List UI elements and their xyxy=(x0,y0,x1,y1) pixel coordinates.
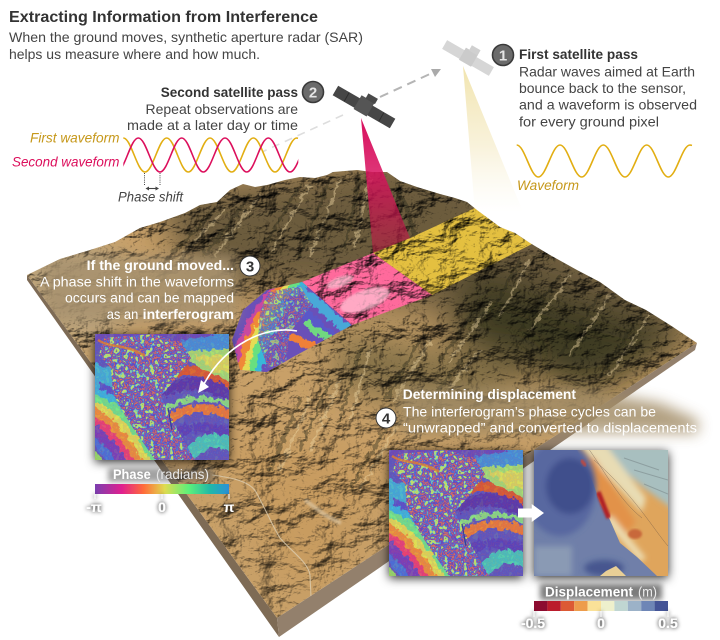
step 3 heading: If the ground moved... xyxy=(87,257,234,273)
phase shift marker xyxy=(144,173,160,190)
left side wall xyxy=(27,275,279,637)
step 1: first satellite pass xyxy=(492,44,697,193)
second satellite beam xyxy=(361,118,410,253)
displacement ticks and labels: -0.5 xyxy=(521,615,545,631)
step 3: interferogram xyxy=(40,256,297,515)
pale patches on pink band xyxy=(326,274,391,314)
title block xyxy=(9,9,363,62)
step 3 body: A phase shift in the waveforms xyxy=(40,274,234,290)
second satellite icon xyxy=(332,78,400,130)
badge 3 xyxy=(240,256,260,276)
step 1 body: for every ground pixel xyxy=(519,114,659,130)
pale wash xyxy=(305,500,341,523)
tan text backing xyxy=(400,389,698,433)
step 2 heading: Second satellite pass xyxy=(161,84,298,100)
badge 3: 3 xyxy=(246,258,254,276)
step 3 body: interferogram xyxy=(143,306,234,322)
road xyxy=(212,475,311,597)
arrow head xyxy=(431,69,441,77)
first satellite icon xyxy=(442,33,498,77)
phase ticks and labels: 0 xyxy=(158,499,166,515)
first waveform xyxy=(123,138,298,172)
legend dark backing xyxy=(108,468,214,482)
badge 4: 4 xyxy=(382,410,391,428)
phase legend xyxy=(86,466,235,515)
single waveform xyxy=(517,145,692,177)
step 4 body: “unwrapped” and converted to displacements xyxy=(403,420,697,436)
step 3 body: occurs and can be mapped xyxy=(65,290,234,306)
displacement ticks and labels: 0.5 xyxy=(658,615,678,631)
western block xyxy=(534,450,657,576)
yellow band xyxy=(373,208,532,295)
step 4 heading: Determining displacement xyxy=(403,386,576,402)
phase legend title xyxy=(113,466,209,482)
title block: helps us measure where and how much. xyxy=(9,46,260,62)
badge 2 xyxy=(302,82,324,102)
dashed arrow xyxy=(380,73,432,97)
phase ticks and labels: π xyxy=(224,499,235,515)
subtitle: When the ground moves, synthetic aperture radar (SAR) xyxy=(9,29,363,45)
white arrow xyxy=(518,504,544,522)
displacement map xyxy=(524,440,674,576)
displacement ticks and labels: 0 xyxy=(597,615,605,631)
mountain ridges xyxy=(165,178,650,490)
step 1 body: bounce back to the sensor, xyxy=(519,80,686,96)
terrain block xyxy=(27,170,697,637)
dashed path between passes xyxy=(262,69,441,152)
step 1 body xyxy=(519,64,697,130)
displacement legend title: (m) xyxy=(638,584,657,600)
terrain surface xyxy=(27,170,697,618)
step 3 body xyxy=(40,274,234,322)
interferogram image xyxy=(56,326,237,498)
phase ticks and labels xyxy=(86,494,235,515)
tan text backing xyxy=(42,256,236,322)
title: Extracting Information from Interference xyxy=(9,9,318,26)
first satellite beam xyxy=(463,66,523,212)
badge 1 xyxy=(492,44,514,66)
phase shift label: Phase shift xyxy=(118,190,184,205)
badge 2: 2 xyxy=(309,84,317,102)
step 3 body: as an xyxy=(107,306,138,322)
waveform label: Waveform xyxy=(517,178,579,193)
first waveform label: First waveform xyxy=(30,130,120,146)
second waveform xyxy=(117,138,312,172)
phase ticks and labels: -π xyxy=(86,499,102,515)
phase color bar xyxy=(95,484,229,494)
badge 1: 1 xyxy=(499,48,507,64)
pink band xyxy=(302,253,432,325)
legend dark backing xyxy=(540,584,662,600)
faint dashes xyxy=(262,115,343,152)
displacement ticks and labels xyxy=(521,611,678,631)
curved arrow xyxy=(198,330,297,393)
interferogram strip on terrain xyxy=(232,282,352,372)
step 2 body xyxy=(127,101,298,133)
step 1 body: and a waveform is observed xyxy=(519,96,697,112)
phase legend title: Phase xyxy=(113,466,151,482)
red streak xyxy=(598,492,609,518)
step 1 heading: First satellite pass xyxy=(519,46,638,62)
displacement legend title: Displacement xyxy=(545,584,633,600)
step 4 body: The interferogram’s phase cycles can be xyxy=(403,404,656,420)
right side wall xyxy=(277,343,697,637)
step 4 body xyxy=(403,404,697,436)
displacement legend xyxy=(521,584,678,631)
phase legend title: (radians) xyxy=(156,466,209,482)
interferogram image, copy xyxy=(350,442,531,614)
step 2 body: Repeat observations are xyxy=(146,101,298,117)
step 4: displacement xyxy=(350,386,698,631)
displacement color bar xyxy=(534,601,668,611)
step 1 body: Radar waves aimed at Earth xyxy=(519,64,695,80)
step 2 body: made at a later day or time xyxy=(127,117,298,133)
second waveform label: Second waveform xyxy=(12,154,120,170)
step 2: second satellite pass xyxy=(12,82,324,205)
badge 4 xyxy=(376,408,396,428)
